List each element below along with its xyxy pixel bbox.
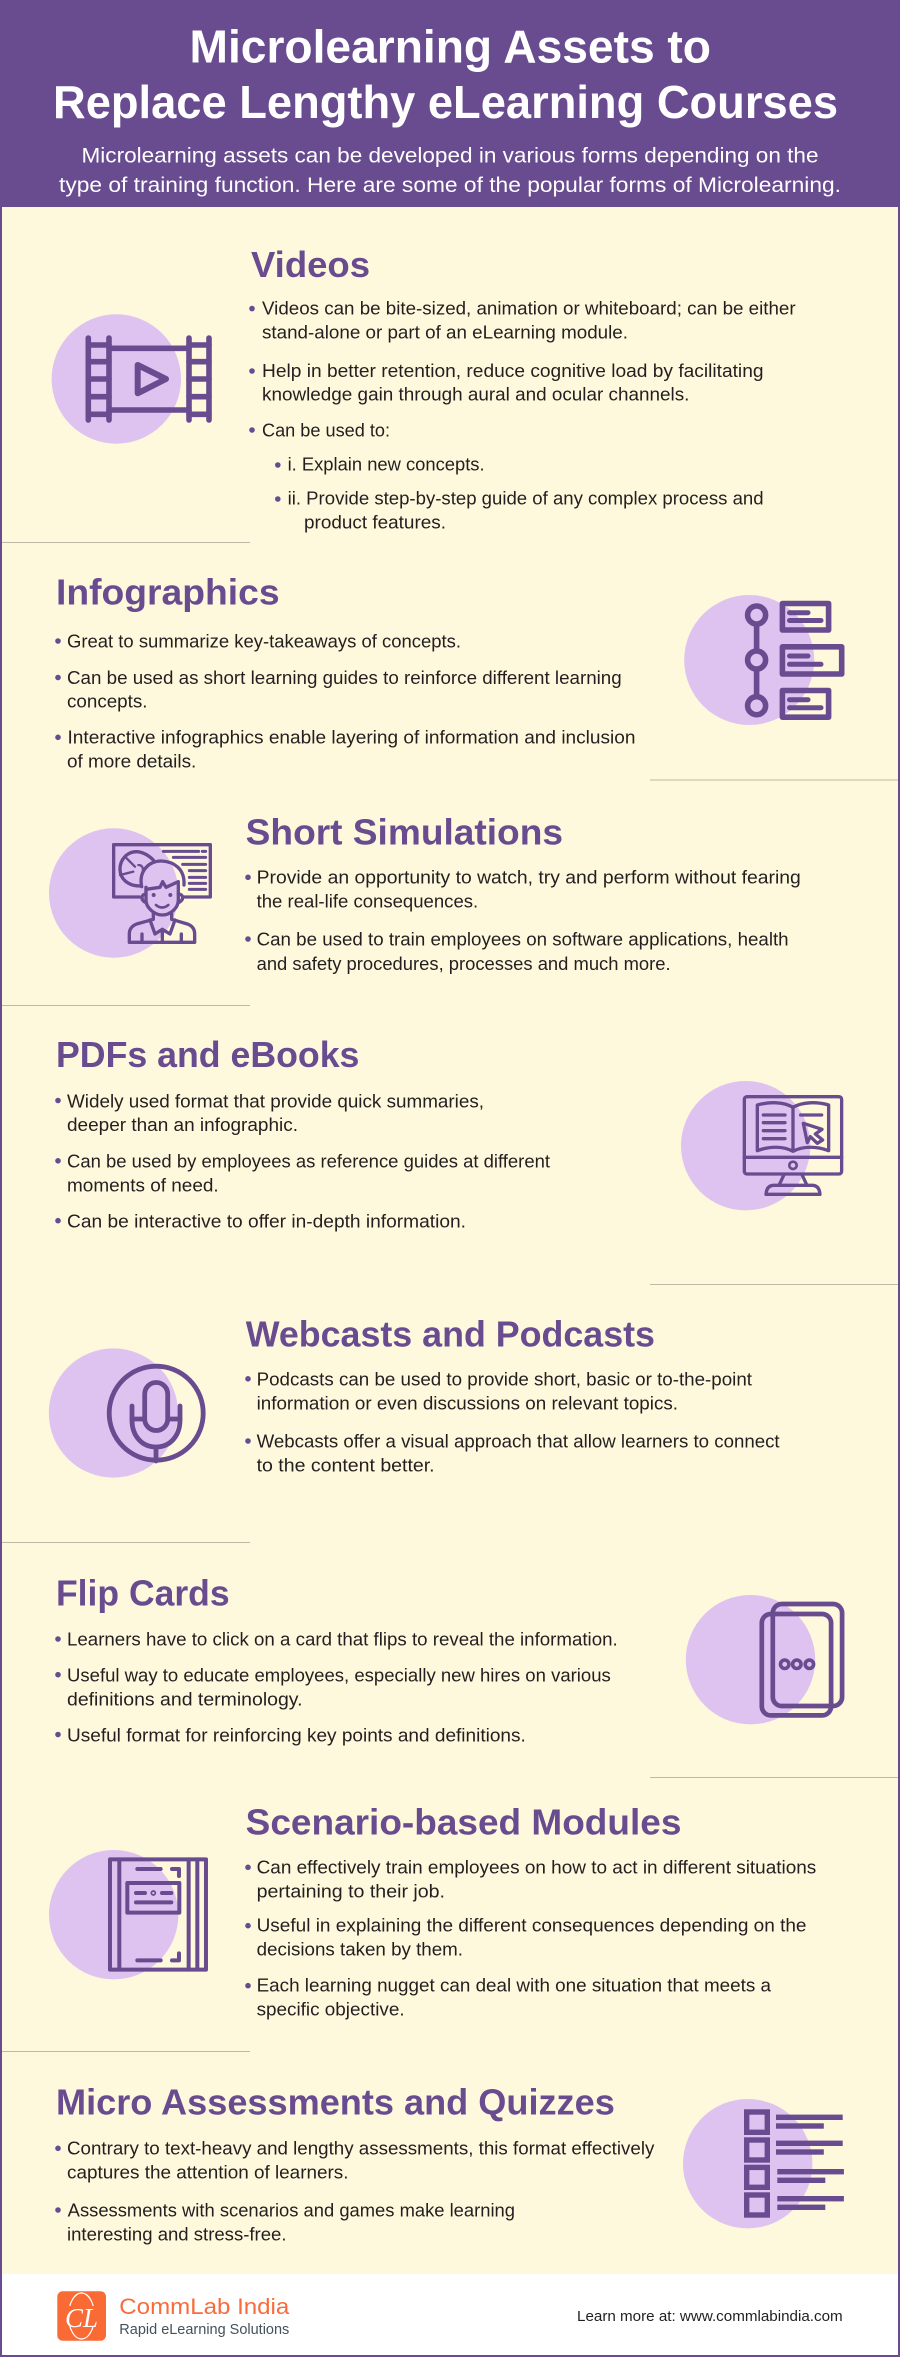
panel: scenario-based modules bbox=[49, 1801, 816, 2020]
text block: scenario-based modules bullets: decisions taken by them. bbox=[257, 1940, 463, 1960]
text block: flip cards bullets: Learners have to click on a card that flips to reveal the information. bbox=[67, 1629, 618, 1649]
text block: flip cards bullets: Useful way to educate employees, especially new hires on various bbox=[67, 1666, 611, 1686]
icon: flip cards bbox=[686, 1595, 842, 1724]
text block: videos bullets: ii. Provide step-by-step guide of any complex process and bbox=[288, 489, 764, 509]
text block: short simulations bullets: Provide an opportunity to watch, try and perform without fearing bbox=[257, 868, 801, 888]
text block: pdfs and ebooks bullets: Widely used format that provide quick summaries, bbox=[67, 1091, 484, 1111]
icon: monitor with open book and cursor bbox=[681, 1081, 842, 1210]
heading: scenario-based modules: Scenario-based Modules bbox=[246, 1801, 681, 1842]
text block: flip cards bullets: definitions and terminology. bbox=[67, 1690, 302, 1710]
text block: pdfs and ebooks bullets: Can be interactive to offer in-depth information. bbox=[67, 1211, 466, 1231]
text block: scenario-based modules bullets bbox=[245, 1858, 816, 2020]
text block: webcasts and podcasts bullets: information or even discussions on relevant topics. bbox=[257, 1393, 678, 1413]
text block: infographics bullets bbox=[55, 632, 635, 772]
text block: micro assessments bullets: Contrary to text-heavy and lengthy assessments, this format effectively bbox=[67, 2138, 654, 2158]
heading: flip cards: Flip Cards bbox=[56, 1573, 230, 1614]
text block: videos bullets bbox=[249, 299, 796, 533]
subtitle: type of training function. Here are some of the popular forms of Microlearning. bbox=[59, 173, 841, 197]
text block: infographics bullets: of more details. bbox=[67, 752, 196, 772]
heading: short simulations: Short Simulations bbox=[246, 811, 563, 852]
icon: presenter in front of a board bbox=[49, 828, 210, 958]
text block: videos bullets: Can be used to: bbox=[262, 420, 390, 440]
text block: webcasts and podcasts bullets: to the content better. bbox=[257, 1455, 435, 1475]
panel: short simulations bbox=[49, 811, 801, 974]
text block: infographics bullets: Great to summarize key-takeaways of concepts. bbox=[67, 632, 461, 652]
text block: flip cards bullets: Useful format for reinforcing key points and definitions. bbox=[67, 1726, 526, 1746]
text block: infographics bullets: Can be used as short learning guides to reinforce different learning bbox=[67, 668, 622, 688]
text block: micro assessments bullets: captures the attention of learners. bbox=[67, 2163, 348, 2183]
icon: module booklet bbox=[49, 1850, 206, 1979]
text block: short simulations bullets: the real-life consequences. bbox=[257, 892, 478, 912]
text block: pdfs and ebooks bullets: deeper than an infographic. bbox=[67, 1115, 298, 1135]
icon: quiz checklist bbox=[683, 2099, 844, 2228]
text block: pdfs and ebooks bullets: Can be used by employees as reference guides at different bbox=[67, 1152, 550, 1172]
text block: scenario-based modules bullets: Each learning nugget can deal with one situation that meets a bbox=[257, 1976, 772, 1996]
heading: pdfs and ebooks: PDFs and eBooks bbox=[56, 1034, 359, 1075]
heading: webcasts and podcasts: Webcasts and Podcasts bbox=[246, 1313, 655, 1354]
text block: flip cards bullets bbox=[55, 1629, 618, 1746]
text block: micro assessments bullets: interesting and stress-free. bbox=[67, 2225, 286, 2245]
link text: Learn more at: www.commlabindia.com bbox=[577, 2309, 843, 2325]
icon: film strip with play button bbox=[52, 314, 209, 444]
title bbox=[53, 20, 838, 128]
text block: scenario-based modules bullets: Can effectively train employees on how to act in different situations bbox=[257, 1858, 816, 1878]
heading: micro assessments and quizzes: Micro Assessments and Quizzes bbox=[56, 2081, 615, 2122]
text block: webcasts and podcasts bullets: Podcasts can be used to provide short, basic or to-the-point bbox=[257, 1369, 752, 1389]
title: Microlearning Assets to bbox=[190, 20, 711, 72]
logo: CommLab India: Rapid eLearning Solutions bbox=[119, 2322, 289, 2338]
text block: short simulations bullets: Can be used to train employees on software applications, health bbox=[257, 930, 789, 950]
heading: videos: Videos bbox=[251, 244, 370, 285]
text block: scenario-based modules bullets: specific objective. bbox=[257, 2000, 405, 2020]
text block: videos bullets: stand-alone or part of an eLearning module. bbox=[262, 323, 628, 343]
text block: micro assessments bullets bbox=[55, 2138, 654, 2245]
text block: infographics bullets: Interactive infographics enable layering of information and inclusion bbox=[68, 728, 636, 748]
header bbox=[53, 20, 841, 197]
subtitle bbox=[59, 144, 841, 197]
panel: videos bbox=[52, 244, 796, 533]
logo: CommLab India bbox=[57, 2291, 290, 2341]
subtitle: Microlearning assets can be developed in various forms depending on the bbox=[82, 144, 818, 168]
text block: videos bullets: knowledge gain through aural and ocular channels. bbox=[262, 385, 689, 405]
panel: micro assessments and quizzes bbox=[55, 2081, 844, 2245]
text block: scenario-based modules bullets: pertaining to their job. bbox=[257, 1882, 445, 1902]
text block: videos bullets: i. Explain new concepts. bbox=[288, 455, 485, 475]
text block: videos bullets: product features. bbox=[304, 513, 446, 533]
panel: infographics bbox=[55, 571, 842, 772]
text block: pdfs and ebooks bullets: moments of need. bbox=[67, 1176, 219, 1196]
text block: videos bullets: Help in better retention, reduce cognitive load by facilitating bbox=[262, 361, 764, 381]
text block: webcasts and podcasts bullets: Webcasts offer a visual approach that allow learners to connect bbox=[257, 1432, 780, 1452]
title: Replace Lengthy eLearning Courses bbox=[53, 76, 838, 128]
panel: flip cards bbox=[55, 1573, 842, 1746]
logo: CommLab India: CommLab India bbox=[119, 2294, 290, 2319]
text block: pdfs and ebooks bullets bbox=[55, 1091, 550, 1231]
icon: microphone in a ring bbox=[49, 1348, 203, 1478]
text block: webcasts and podcasts bullets bbox=[245, 1369, 780, 1475]
text block: micro assessments bullets: Assessments with scenarios and games make learning bbox=[68, 2201, 515, 2221]
text block: videos bullets: Videos can be bite-sized, animation or whiteboard; can be either bbox=[262, 299, 796, 319]
text block: short simulations bullets bbox=[245, 868, 801, 974]
text block: short simulations bullets: and safety procedures, processes and much more. bbox=[257, 954, 671, 974]
logo: CommLab India: CL bbox=[65, 2303, 98, 2333]
panel: pdfs and ebooks bbox=[55, 1034, 842, 1231]
icon: timeline with info boxes bbox=[684, 595, 842, 725]
text block: infographics bullets: concepts. bbox=[67, 692, 148, 712]
footer bbox=[57, 2291, 843, 2341]
panel: webcasts and podcasts bbox=[49, 1313, 780, 1478]
text block: scenario-based modules bullets: Useful in explaining the different consequences depending on the bbox=[257, 1916, 807, 1936]
heading: infographics: Infographics bbox=[56, 571, 280, 612]
